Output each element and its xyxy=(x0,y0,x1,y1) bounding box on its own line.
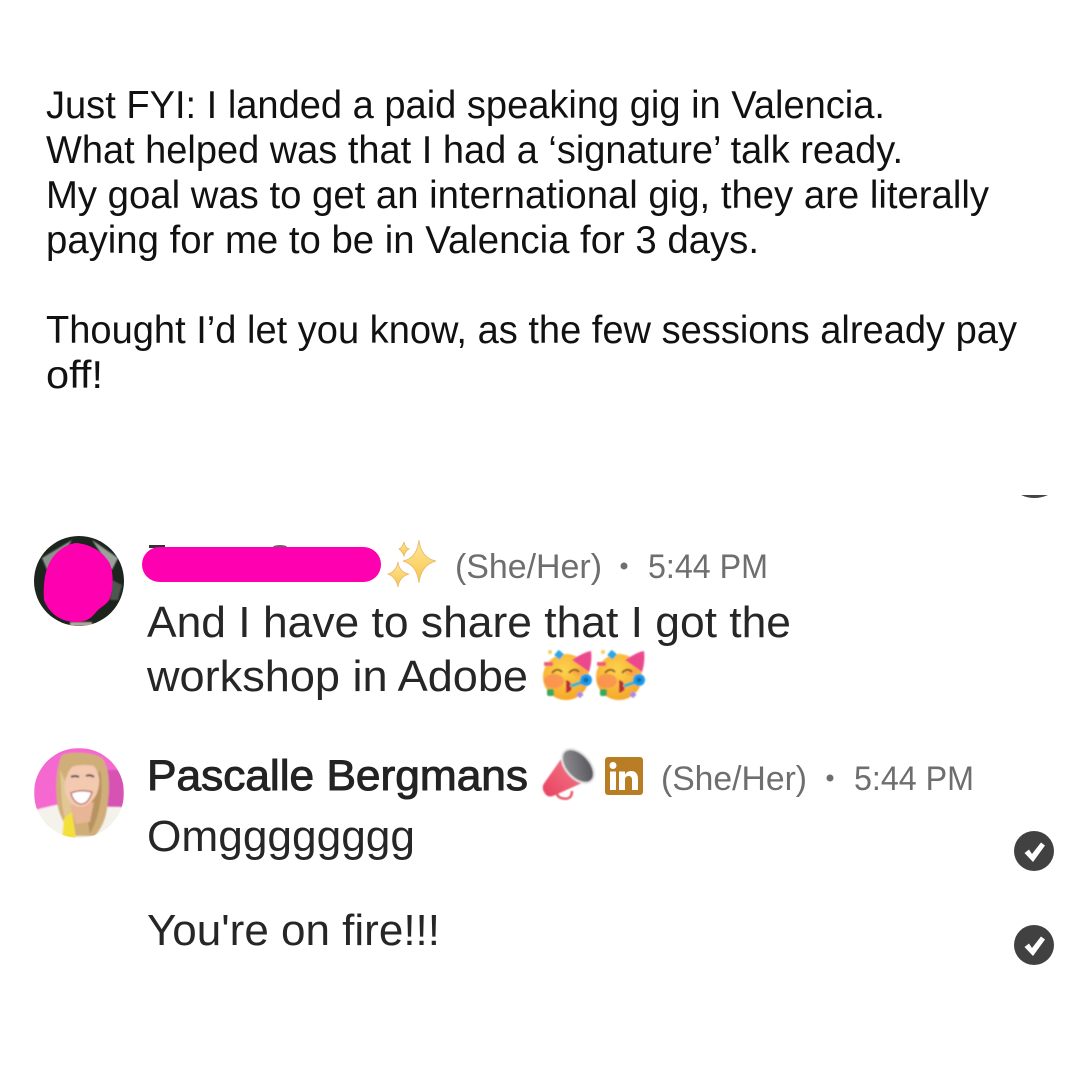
text block: quoted message: off! xyxy=(46,354,103,397)
sender pronouns and time: (She/Her) xyxy=(455,548,602,586)
message text: Omgggggggg: Omgggggggg xyxy=(147,812,415,861)
icon: LinkedIn badge xyxy=(605,757,643,795)
message text: Adobe workshop xyxy=(146,598,791,701)
text block: quoted message: Thought I’d let you know, as the few sessions already pay xyxy=(46,309,1018,352)
icon: clipped status circle xyxy=(1021,495,1048,498)
icon: read check mark xyxy=(1014,925,1054,965)
chat message: Pascalle Bergmans xyxy=(30,743,1054,965)
text block: quoted message: Just FYI: I landed a paid speaking gig in Valencia. xyxy=(46,84,885,127)
avatar: redacted sender xyxy=(34,536,124,626)
icon: read check mark xyxy=(1014,831,1054,871)
text block: quoted message xyxy=(46,84,1018,397)
chat message: redacted sender xyxy=(34,536,791,701)
pronouns and time xyxy=(661,760,974,798)
text block: quoted message: paying for me to be in Valencia for 3 days. xyxy=(46,219,759,262)
sender pronouns and time: 5:44 PM xyxy=(648,548,768,586)
icon: partying face emoji xyxy=(596,650,645,700)
sender name: Pascalle Bergmans xyxy=(147,753,528,800)
message text: Adobe workshop: And I have to share that I got the xyxy=(147,598,791,647)
message text: You're on fire: You're on fire!!! xyxy=(147,906,440,955)
text block: quoted message: My goal was to get an international gig, they are literally xyxy=(46,174,990,217)
message text: Adobe workshop: workshop in Adobe xyxy=(146,652,528,701)
icon: partying face emoji xyxy=(543,650,592,700)
avatar: Pascalle Bergmans xyxy=(34,748,124,838)
pronouns and time: (She/Her) xyxy=(661,760,807,798)
sender name peeking above redaction xyxy=(149,545,287,549)
sender pronouns and time xyxy=(455,548,768,586)
redaction bar over sender name xyxy=(142,547,381,582)
icon: sparkles emoji xyxy=(388,540,436,587)
icon: megaphone emoji xyxy=(543,743,600,799)
text block: quoted message: What helped was that I had a ‘signature’ talk ready. xyxy=(46,129,903,172)
pronouns and time: 5:44 PM xyxy=(854,760,974,798)
